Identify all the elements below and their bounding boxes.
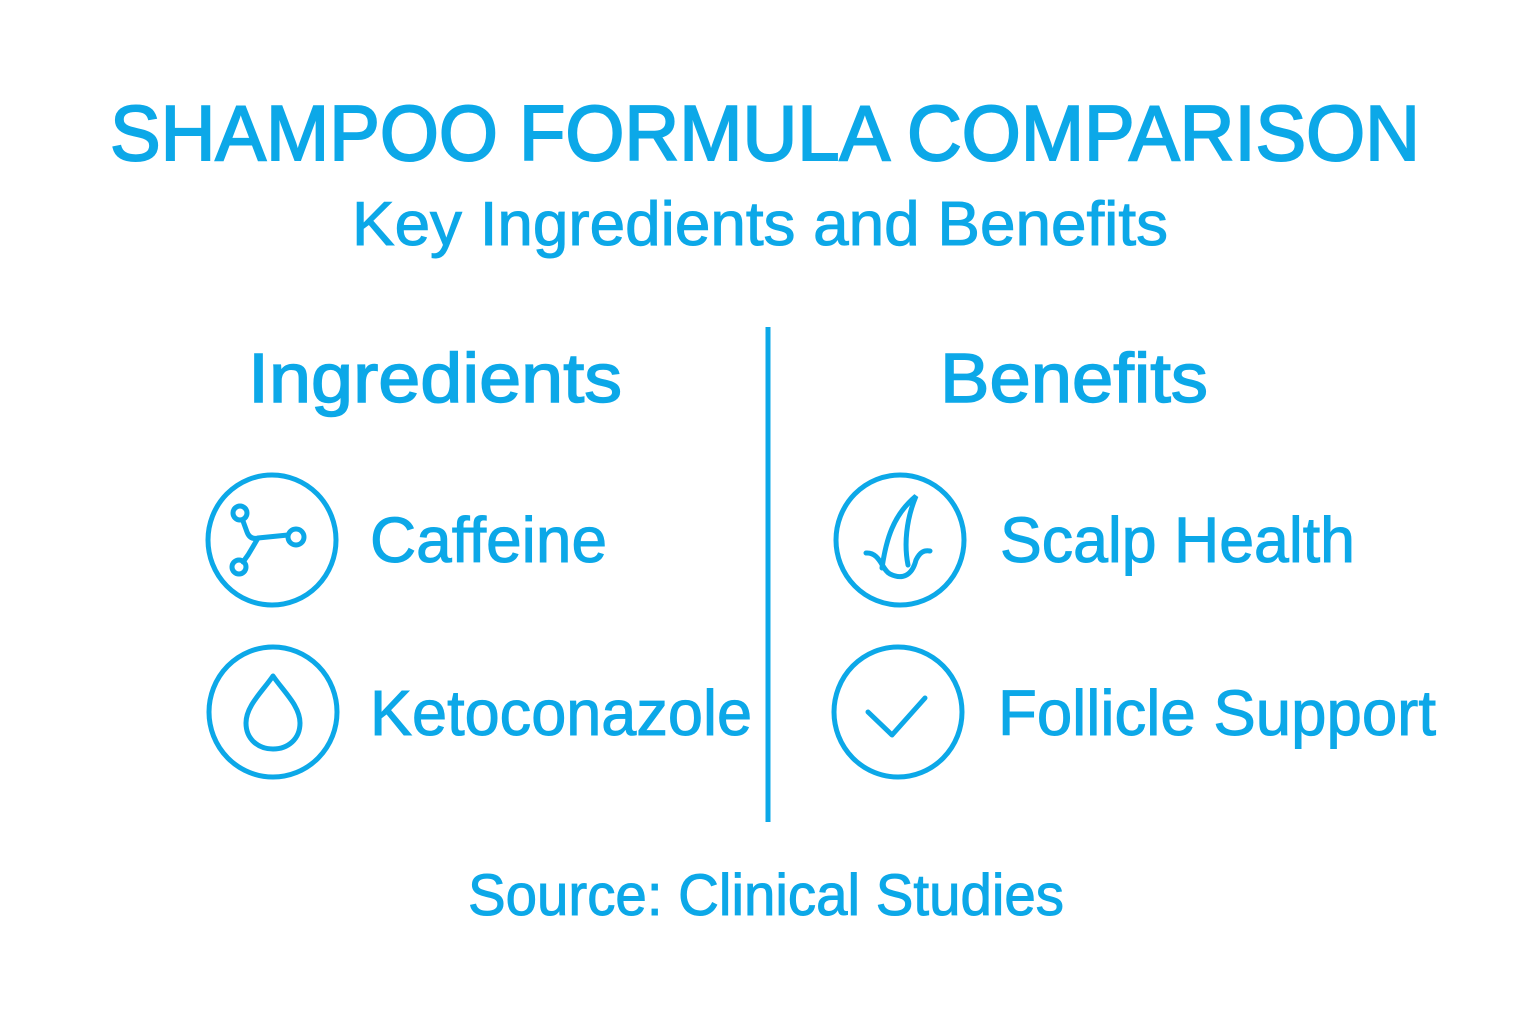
label: follicle support: Follicle Support <box>998 677 1436 749</box>
title: SHAMPOO FORMULA COMPARISON <box>110 89 1420 177</box>
source: Source: Clinical Studies <box>468 863 1064 928</box>
icon: molecule <box>208 475 336 605</box>
icon: drop <box>209 647 337 777</box>
label: caffeine: Caffeine <box>370 504 607 576</box>
divider <box>766 327 770 822</box>
heading: ingredients: Ingredients <box>248 339 622 417</box>
subtitle: Key Ingredients and Benefits <box>352 190 1168 259</box>
icon: hair follicle <box>836 475 964 605</box>
label: ketoconazole: Ketoconazole <box>370 677 752 749</box>
heading: benefits: Benefits <box>940 339 1208 417</box>
label: scalp health: Scalp Health <box>1000 504 1355 576</box>
icon: checkmark <box>834 647 962 777</box>
